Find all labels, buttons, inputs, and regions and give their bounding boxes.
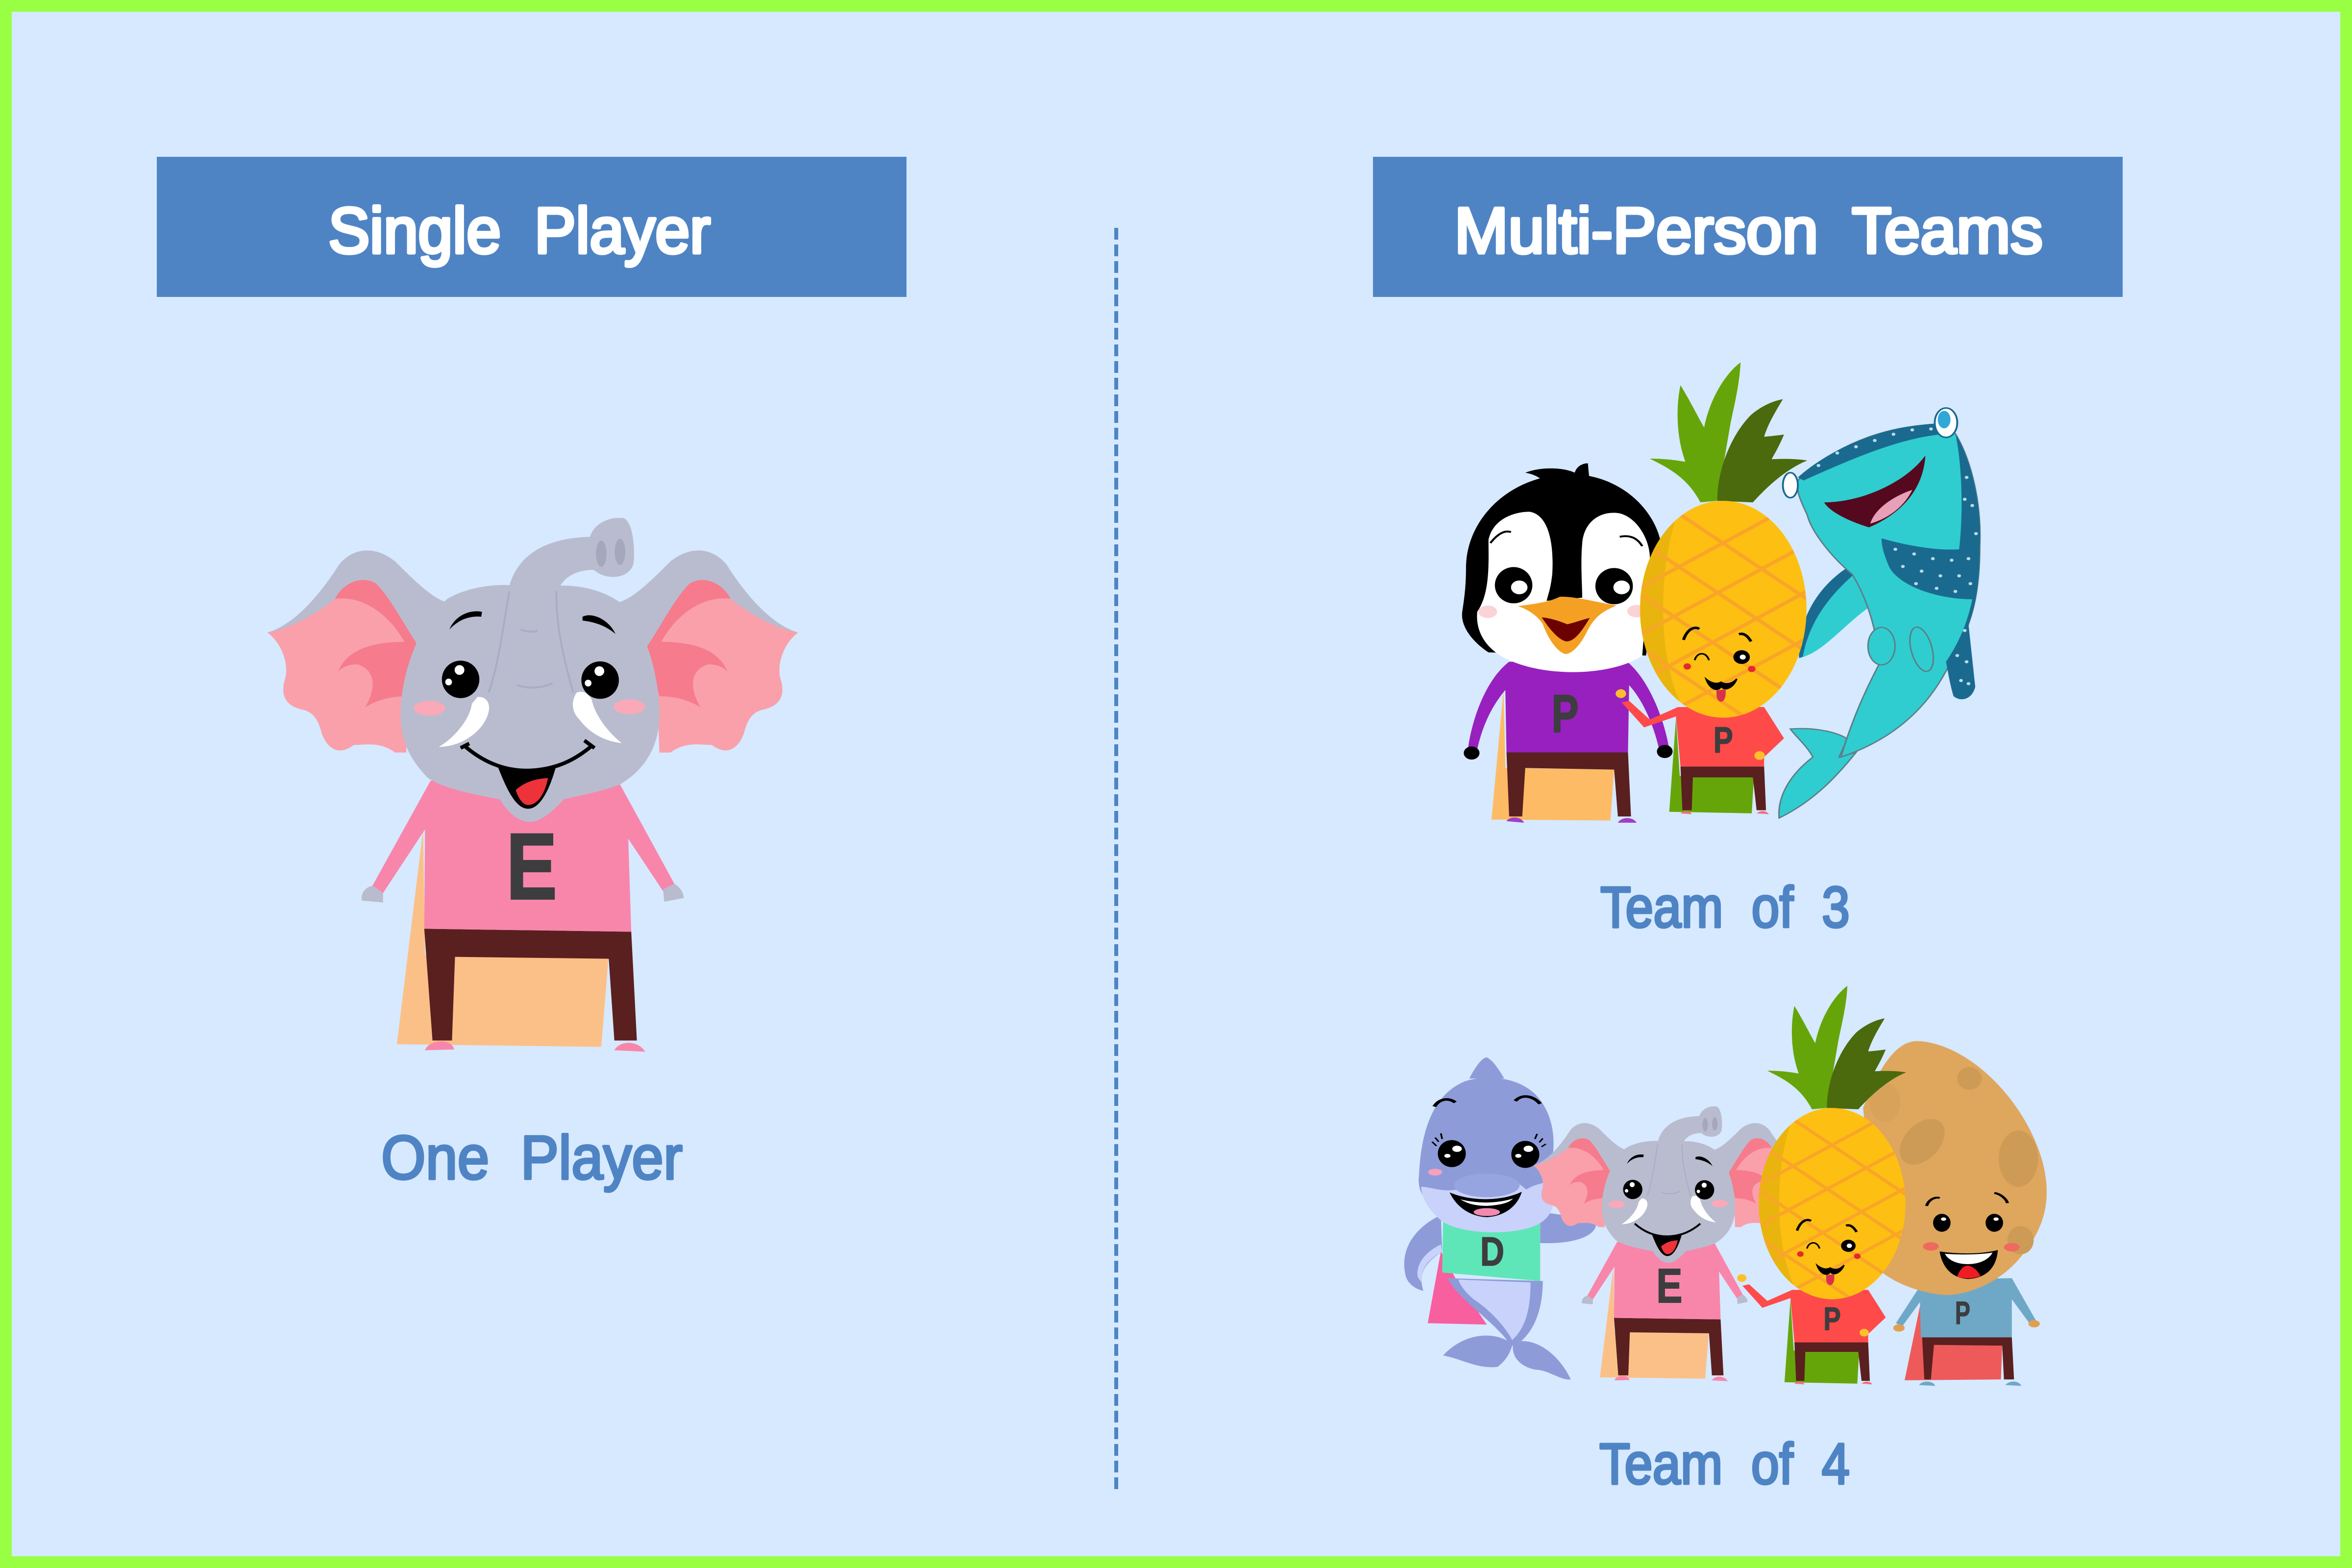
character: pineapple: P (1714, 720, 1733, 760)
character: dolphin: D (1480, 1229, 1504, 1274)
character: penguin: P (1551, 684, 1578, 744)
character: elephant small: E (1656, 1259, 1682, 1313)
header: Single Player: Single Player (328, 195, 710, 267)
character: dolphin (1404, 1057, 1596, 1379)
label: Team of 3: Team of 3 (1600, 875, 1850, 940)
character: whale shark (1779, 408, 1980, 818)
team of 4 illustration (1404, 986, 2047, 1386)
header: Single Player (157, 157, 906, 297)
header: Multi-Person Teams: Multi-Person Teams (1454, 195, 2043, 267)
character: elephant single player: E (506, 814, 557, 919)
label: Team of 4: Team of 4 (1599, 1432, 1850, 1496)
character: pineapple small (1737, 986, 1906, 1384)
character: potato (1863, 1041, 2047, 1386)
dashed divider (1114, 228, 1118, 1490)
character: pineapple (1616, 363, 1807, 814)
header: Multi-Person Teams (1373, 157, 2123, 297)
team of 3 illustration (1462, 363, 1980, 823)
label: One Player: One Player (381, 1123, 683, 1192)
character: potato: P (1955, 1296, 1970, 1331)
character: elephant small (1533, 1106, 1807, 1381)
character: penguin (1462, 464, 1673, 823)
character: pineapple small: P (1824, 1301, 1841, 1337)
character: elephant single player (268, 518, 798, 1052)
